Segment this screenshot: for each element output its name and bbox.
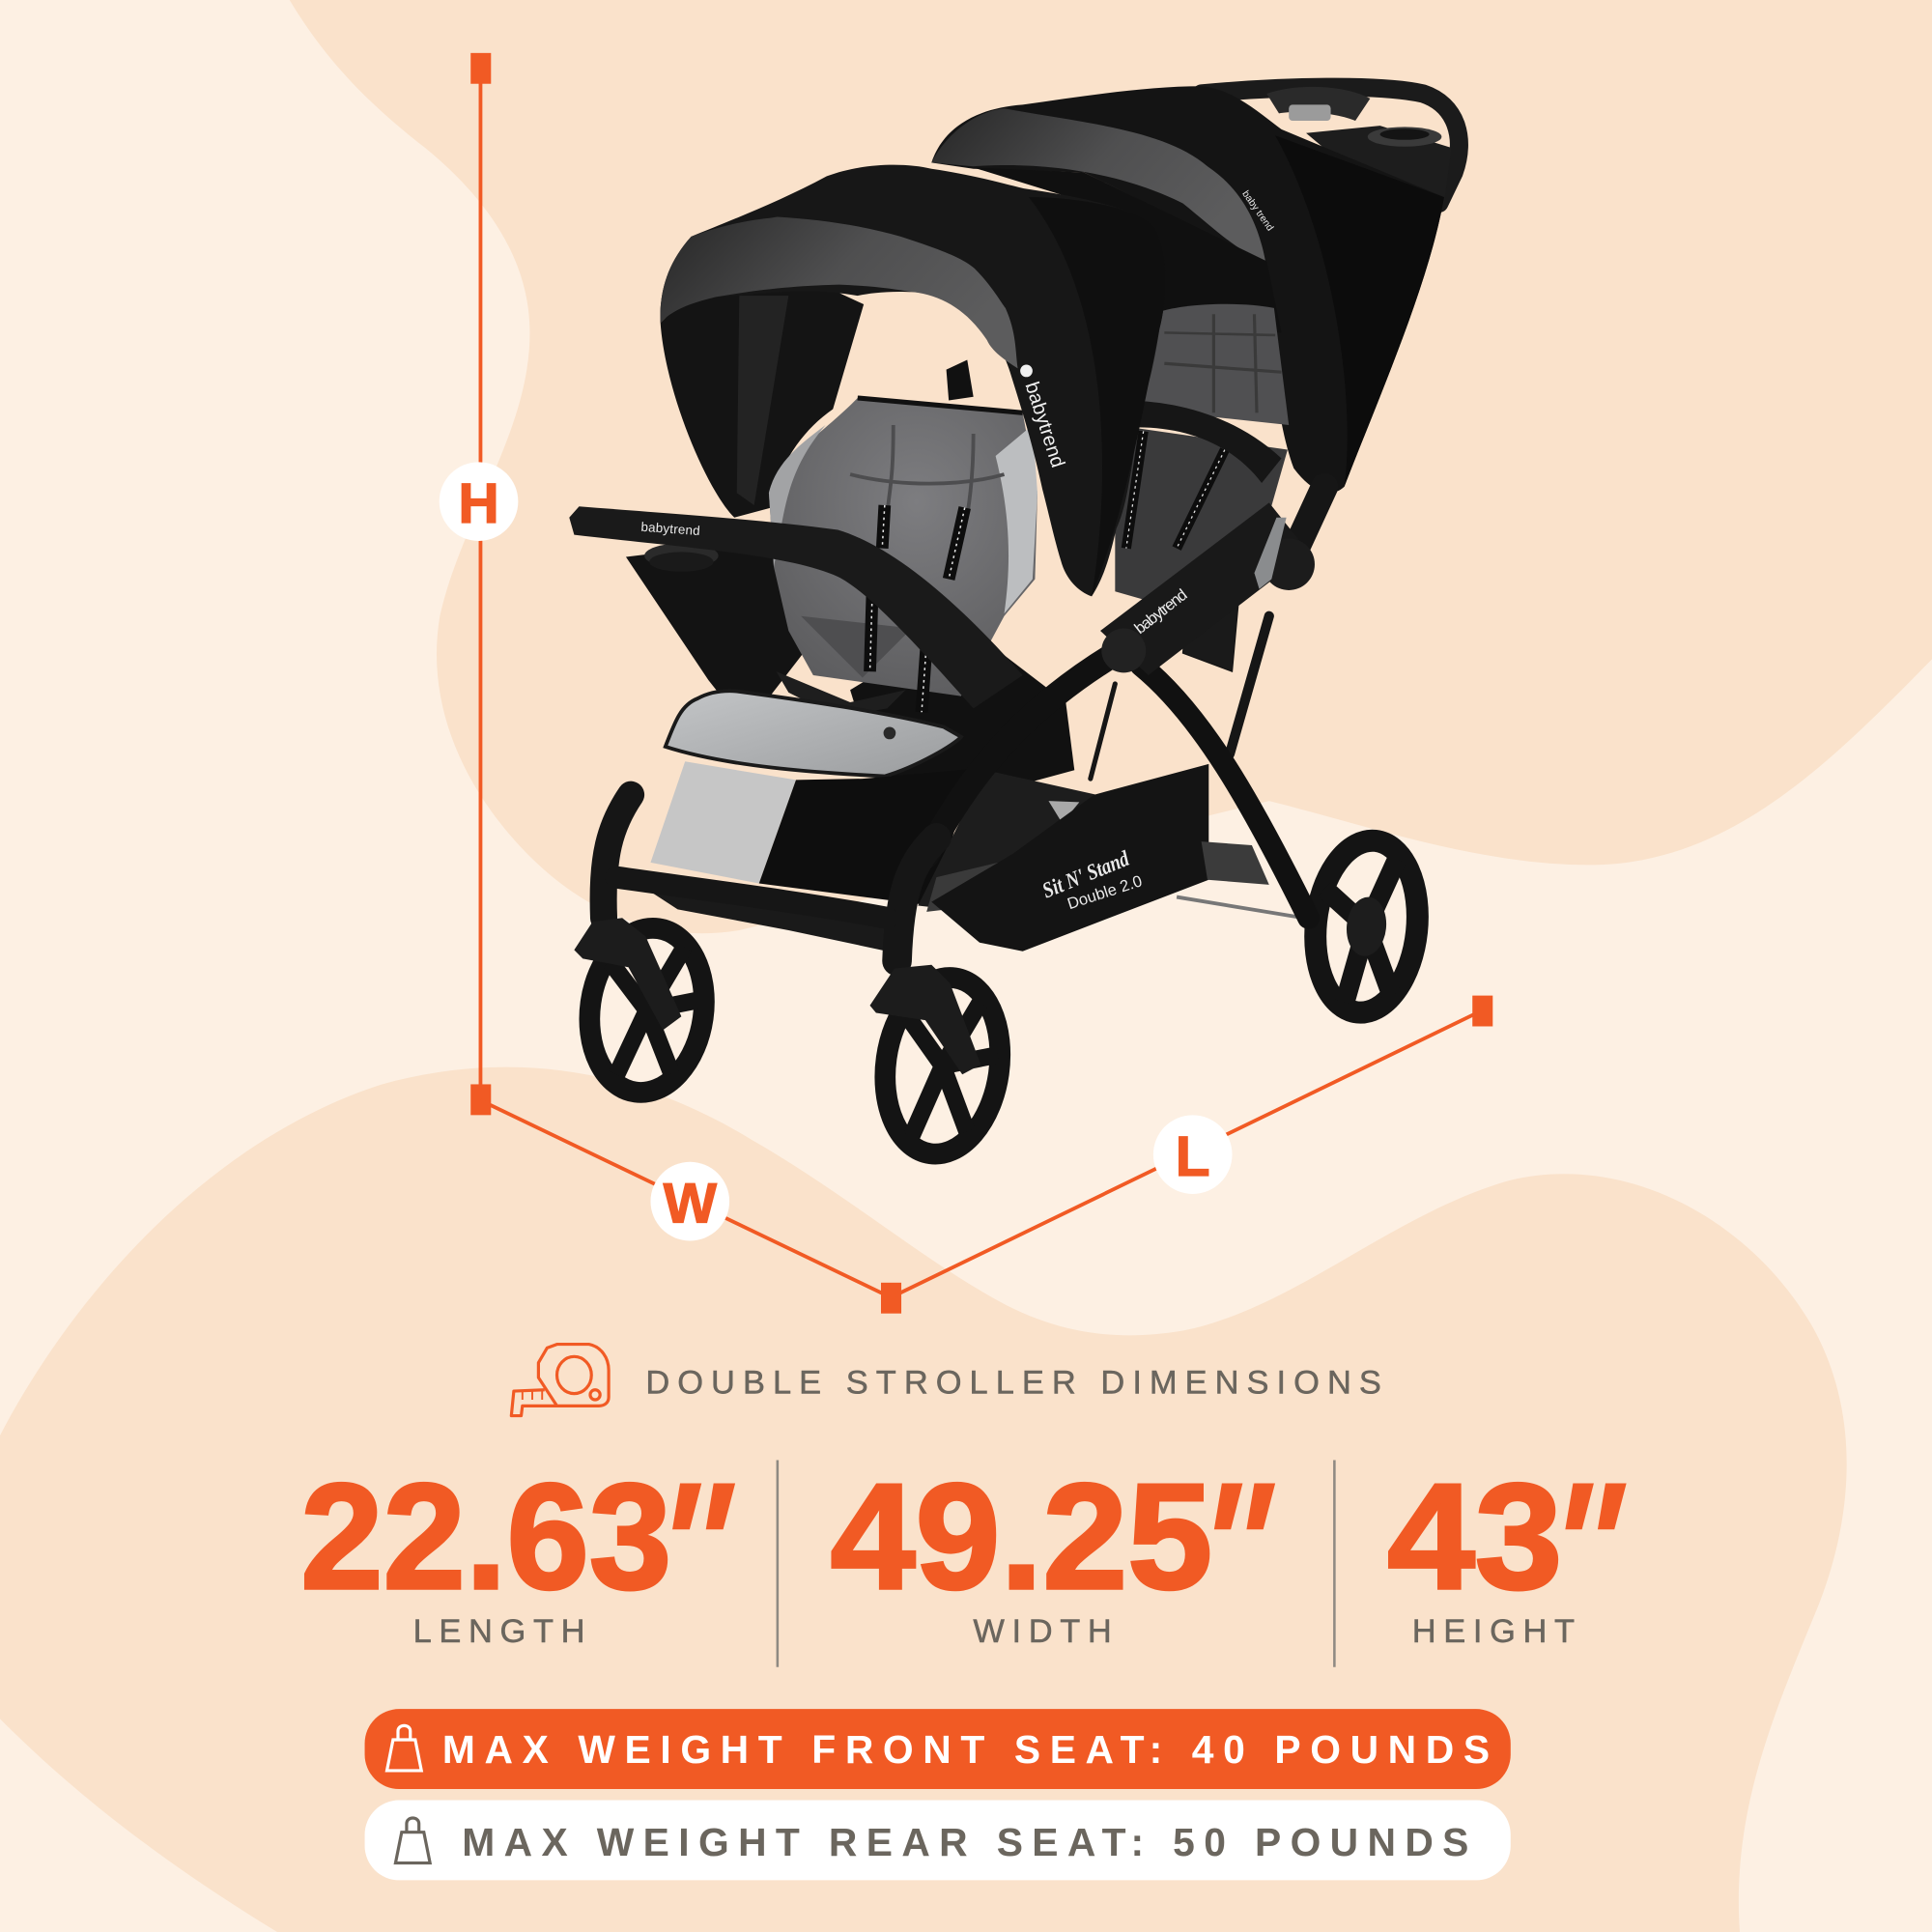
front-left wheel <box>580 921 715 1100</box>
stat: height: 43 <box>1387 1452 1562 1620</box>
icon: rear seat weight <box>395 1818 430 1863</box>
pill: rear seat weight <box>365 1801 1511 1880</box>
front canopy <box>661 165 1165 596</box>
length dimension line <box>891 996 1492 1297</box>
left rear tray structure <box>626 545 804 727</box>
rear wheel <box>1307 836 1426 1017</box>
rear canopy visor <box>931 108 1265 261</box>
height badge H <box>440 462 518 541</box>
front seat pad <box>769 398 1037 696</box>
cup holder <box>644 543 719 572</box>
arm bar logo: babytrend <box>640 520 700 538</box>
under-seat mesh panel <box>650 761 796 884</box>
icon: tape measure <box>511 1345 609 1416</box>
front canopy visor <box>661 216 1018 368</box>
divider <box>777 1460 779 1667</box>
rear axle and footboard <box>1177 841 1303 918</box>
stat: height <box>1387 1443 1645 1650</box>
basket brand text: Sit N' Stand <box>1038 846 1133 902</box>
rear handle <box>1202 87 1459 203</box>
pill: front seat weight: MAX WEIGHT FRONT SEAT: 40 POUNDS <box>442 1727 1490 1772</box>
front canopy curtain <box>661 246 864 518</box>
front-right wheel <box>874 970 1011 1161</box>
length badge L: L <box>1176 1125 1210 1188</box>
background blob: top <box>290 0 1932 933</box>
front frame tubes and bumper <box>604 795 936 961</box>
background blob: bottom <box>0 1067 1847 1932</box>
frame hub <box>1101 629 1146 672</box>
width badge W <box>650 1162 729 1240</box>
height badge H: H <box>458 472 499 535</box>
heading: DOUBLE STROLLER DIMENSIONS <box>645 1365 1381 1402</box>
rear frame post and rod <box>1091 487 1324 779</box>
front-right fork <box>870 965 980 1074</box>
under-bumper shadow <box>653 894 887 952</box>
front arm bar <box>569 506 1023 708</box>
rear canopy label: baby trend <box>1239 189 1275 234</box>
stat: width: 49.25 <box>831 1452 1212 1620</box>
frame upper arm <box>1100 502 1309 675</box>
rear canopy side panel <box>1275 135 1444 487</box>
seat headrest tag <box>947 359 974 401</box>
storage basket mesh <box>918 770 1096 912</box>
pill: front seat weight <box>365 1709 1511 1789</box>
front canopy side panel <box>1029 197 1165 596</box>
main folding frame <box>926 653 1309 918</box>
front canopy logo: babytrend <box>1020 380 1068 470</box>
height dimension line <box>470 53 491 1115</box>
front-left fork <box>574 918 681 1030</box>
latch and pivot <box>1254 518 1315 590</box>
center black panel <box>850 622 1074 801</box>
stat: width: " <box>1177 1443 1294 1650</box>
stat: length: " <box>634 1443 754 1650</box>
stroller photo illustration <box>569 86 1459 1161</box>
footrest logo <box>884 727 895 739</box>
storage basket <box>931 764 1208 952</box>
stat: height: " <box>1527 1443 1645 1650</box>
width badge W: W <box>664 1172 718 1235</box>
rear lower seat and straps <box>1115 425 1288 616</box>
footrest <box>666 691 961 777</box>
rear canopy underside <box>974 167 1282 332</box>
stat: width <box>831 1443 1294 1650</box>
front seat straps <box>777 505 965 717</box>
rear seat pad <box>1140 304 1289 425</box>
pill: rear seat weight: MAX WEIGHT REAR SEAT: 50 POUNDS <box>462 1820 1468 1864</box>
icon: front seat weight <box>387 1725 421 1771</box>
stat: length <box>300 1443 754 1650</box>
rear canopy <box>931 86 1444 493</box>
stat: width: WIDTH <box>973 1613 1119 1650</box>
length badge L <box>1153 1115 1233 1194</box>
stat: length: LENGTH <box>413 1613 592 1650</box>
stat: length: 22.63 <box>300 1452 671 1620</box>
divider <box>1333 1460 1335 1667</box>
frame arm logo: babytrend <box>1131 585 1191 638</box>
stat: height: HEIGHT <box>1412 1613 1582 1650</box>
under-seat black panel <box>759 769 974 906</box>
basket brand text: Double 2.0 <box>1065 871 1145 913</box>
rear arm bar <box>1122 401 1282 483</box>
width dimension line <box>480 1100 901 1314</box>
